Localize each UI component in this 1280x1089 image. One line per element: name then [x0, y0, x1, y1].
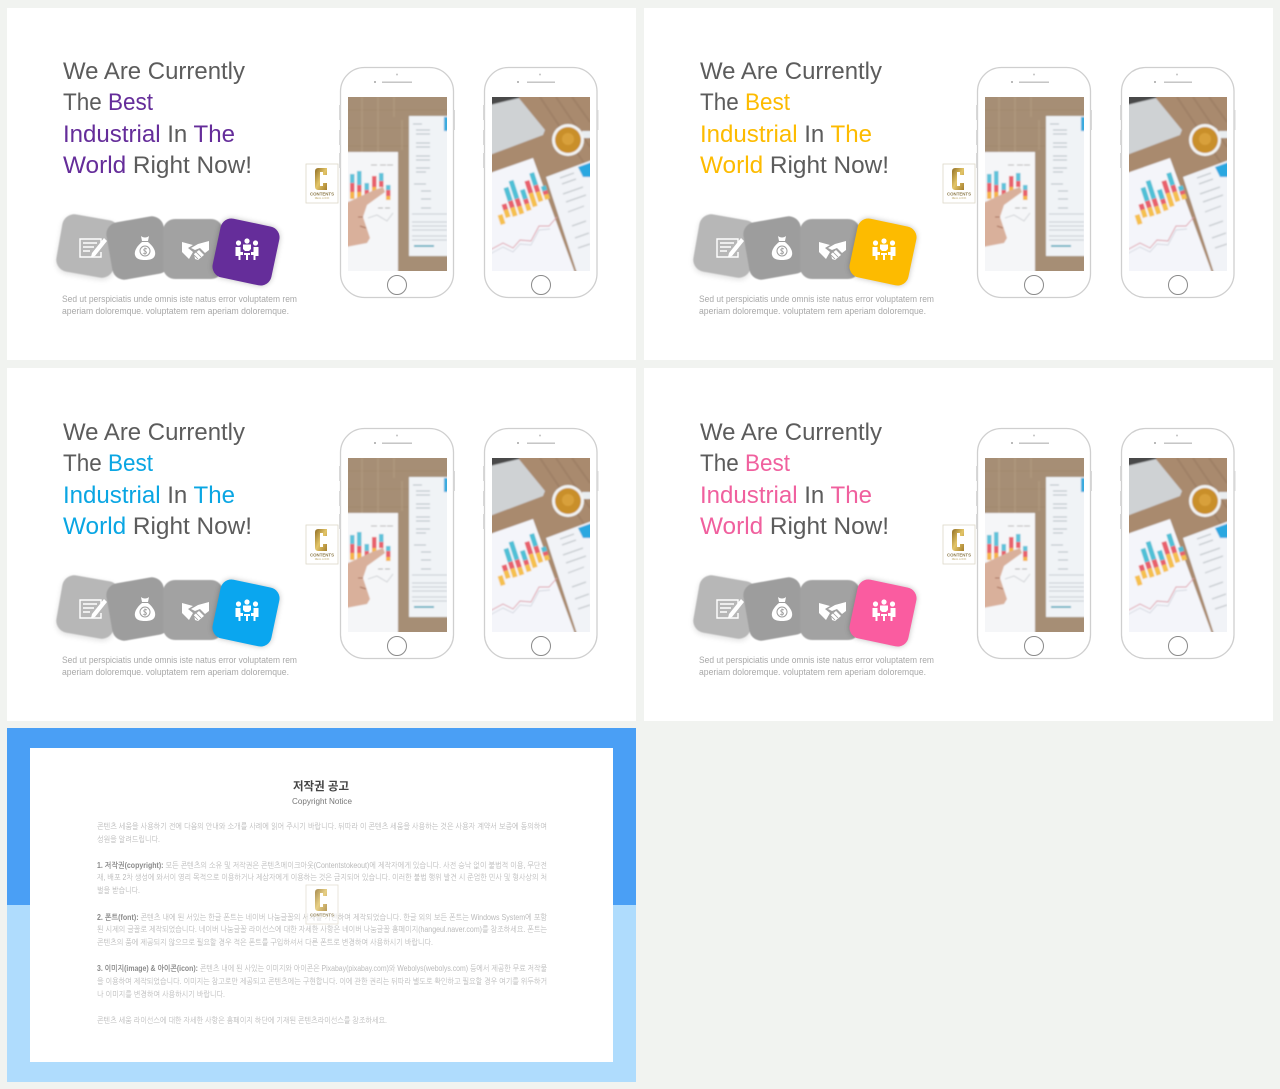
panel: copyright notice slide — [7, 728, 636, 1082]
heading: copyright title: 저작권 공고 — [293, 779, 349, 793]
text block: copyright intro: 콘텐츠 세움을 사용하기 전에 다음의 안내와 소개를 사례에 읽어 주시기 바랍니다. 뒤따라 이 콘텐츠 세움을 사용하는 것은 사용자 계약서 보증에 동의하여 — [97, 822, 547, 831]
heading: pink slide title: We Are Currently — [700, 419, 882, 446]
text block: section 2 font: 2. 폰트(font): 콘텐츠 내에 된 서있는 한글 폰트는 네이버 나눔글꼴의 서체를 기반하여 제작되었습니다. 한글 외의 보든 폰트는 Windows System에 포함 — [97, 913, 547, 922]
text block: section 3 image and icon: 을 이용하여 제작되었습니다. 이미지는 참고로만 제공되고 콘텐츠에는 구현합니다. 이에 관한 권리는 뒤따라 별도로 확인하고 필요할 경우 여기를 위두하거 — [97, 977, 547, 986]
logo: contents badge: REAL LOOK — [952, 557, 967, 561]
heading: pink slide title: Industrial In The — [700, 482, 872, 509]
text block: blue slide caption: aperiam doloremque. voluptatem rem aperiam doloremque. — [62, 667, 289, 678]
text block: yellow slide caption: Sed ut perspiciatis unde omnis iste natus error voluptatem rem — [699, 294, 934, 305]
heading: blue slide title — [63, 419, 252, 540]
text block: section 2 font: 된 시제의 글꼴로 제작되었습니다. 네이버 나눔글꼴 라이선스에 대한 자세한 사항은 네이버 나눔글꼴 홈페이지(hangeul.naver.com)를 참조하세요. 폰트는 — [97, 925, 547, 934]
text block: copyright intro — [97, 822, 547, 844]
heading: yellow slide title: The Best — [700, 89, 790, 116]
heading: pink slide title: World Right Now! — [700, 513, 889, 540]
text block: section 1 copyright: 벌을 받습니다. — [97, 886, 140, 895]
phone: right mockup — [483, 428, 598, 658]
panel: purple slide — [7, 8, 636, 360]
logo: contents badge: CONTENTS — [310, 552, 334, 558]
icon row: pink tiles — [691, 573, 919, 649]
panel: pink slide — [644, 368, 1273, 721]
text block: yellow slide caption — [699, 294, 934, 317]
heading: blue slide title: We Are Currently — [63, 419, 245, 446]
heading: copyright title: Copyright Notice — [292, 797, 353, 806]
text block: blue slide caption: Sed ut perspiciatis unde omnis iste natus error voluptatem rem — [62, 655, 297, 666]
logo: contents badge: CONTENTS — [947, 192, 971, 196]
text block: yellow slide caption: aperiam doloremque. voluptatem rem aperiam doloremque. — [699, 306, 926, 317]
phone: left mockup — [976, 68, 1092, 298]
phone: left mockup — [339, 68, 455, 298]
logo: contents badge — [306, 525, 338, 564]
heading: purple slide title: We Are Currently — [63, 58, 245, 85]
logo: contents badge — [943, 164, 975, 203]
logo: contents badge: REAL LOOK — [315, 196, 330, 200]
phone: left mockup — [339, 428, 455, 658]
text block: blue slide caption — [62, 655, 297, 678]
panel: blue slide — [7, 368, 636, 721]
logo: contents badge: CONTENTS — [947, 552, 971, 558]
logo: contents badge: REAL LOOK — [315, 557, 330, 561]
heading: blue slide title: The Best — [63, 450, 153, 477]
icon row: purple tiles — [54, 212, 282, 288]
heading: purple slide title: World Right Now! — [63, 152, 252, 179]
heading: copyright title — [292, 779, 353, 806]
panel: yellow slide — [644, 8, 1273, 360]
logo: contents badge — [306, 164, 338, 203]
text block: section 3 image and icon: 나 이미지를 변경하여 사용하시기 바랍니다. — [97, 990, 225, 999]
heading: pink slide title — [700, 419, 889, 540]
text block: section 3 image and icon — [97, 964, 547, 999]
heading: purple slide title: Industrial In The — [63, 121, 235, 148]
heading: pink slide title: The Best — [700, 450, 790, 477]
phone: right mockup — [1120, 428, 1236, 658]
heading: yellow slide title: We Are Currently — [700, 58, 882, 85]
heading: blue slide title: World Right Now! — [63, 513, 252, 540]
text block: purple slide caption: aperiam doloremque. voluptatem rem aperiam doloremque. — [62, 306, 289, 317]
text block: section 1 copyright: 1. 저작권(copyright): 모든 콘텐츠의 소유 및 저작권은 콘텐츠메이크아웃(Contentstokeout)에 제작자에게 있습니다. 사전 승낙 없이 불법적 이용, 무단전 — [97, 861, 547, 870]
logo: contents badge — [306, 885, 338, 924]
text block: purple slide caption: Sed ut perspiciatis unde omnis iste natus error voluptatem rem — [62, 294, 297, 305]
text block: purple slide caption — [62, 294, 297, 317]
icon row: blue tiles — [54, 573, 282, 649]
text block: pink slide caption — [699, 655, 934, 678]
heading: purple slide title: The Best — [63, 89, 153, 116]
text block: pink slide caption: aperiam doloremque. voluptatem rem aperiam doloremque. — [699, 667, 926, 678]
heading: yellow slide title: Industrial In The — [700, 121, 872, 148]
text block: section 2 font: 콘텐츠의 품에 제공되지 않으므로 필요할 경우 적은 폰트를 구입하셔서 다른 폰트로 변경하여 사용하시기 바랍니다. — [97, 938, 433, 947]
heading: yellow slide title: World Right Now! — [700, 152, 889, 179]
icon row: yellow tiles — [691, 212, 919, 288]
text block: license footer: 콘텐츠 세움 라이선스에 대한 자세한 사항은 홈페이지 하단에 기재된 콘텐츠라이선스를 참조하세요. — [97, 1016, 387, 1025]
phone: right mockup — [483, 68, 598, 298]
text block: section 2 font — [97, 913, 547, 947]
phone: right mockup — [1120, 68, 1236, 298]
logo: contents badge: REAL LOOK — [952, 196, 967, 200]
text block: pink slide caption: Sed ut perspiciatis unde omnis iste natus error voluptatem rem — [699, 655, 934, 666]
text block: section 3 image and icon: 3. 이미지(image) & 아이콘(icon): 콘텐츠 내에 된 사있는 이미지와 아이콘은 Pixabay(pixabay.com)와 Webolys(webolys.com) 등에서 제공한 무료 저작물 — [97, 964, 547, 973]
heading: blue slide title: Industrial In The — [63, 482, 235, 509]
text block: section 1 copyright — [97, 861, 547, 895]
logo: contents badge: CONTENTS — [310, 912, 334, 918]
heading: purple slide title — [63, 58, 252, 179]
heading: yellow slide title — [700, 58, 889, 179]
text block: section 1 copyright: 재, 배포 2차 생성에 와서이 영리 목적으로 이용하거나 제삼자에게 이용하는 것은 금지되어 있습니다. 이러한 불법 행위 발견 시 준엄한 민사 및 형사상의 처 — [97, 873, 547, 882]
logo: contents badge: CONTENTS — [310, 192, 334, 196]
logo: contents badge — [943, 525, 975, 564]
text block: copyright intro: 성원을 알려드립니다. — [97, 835, 160, 844]
phone: left mockup — [976, 428, 1092, 658]
